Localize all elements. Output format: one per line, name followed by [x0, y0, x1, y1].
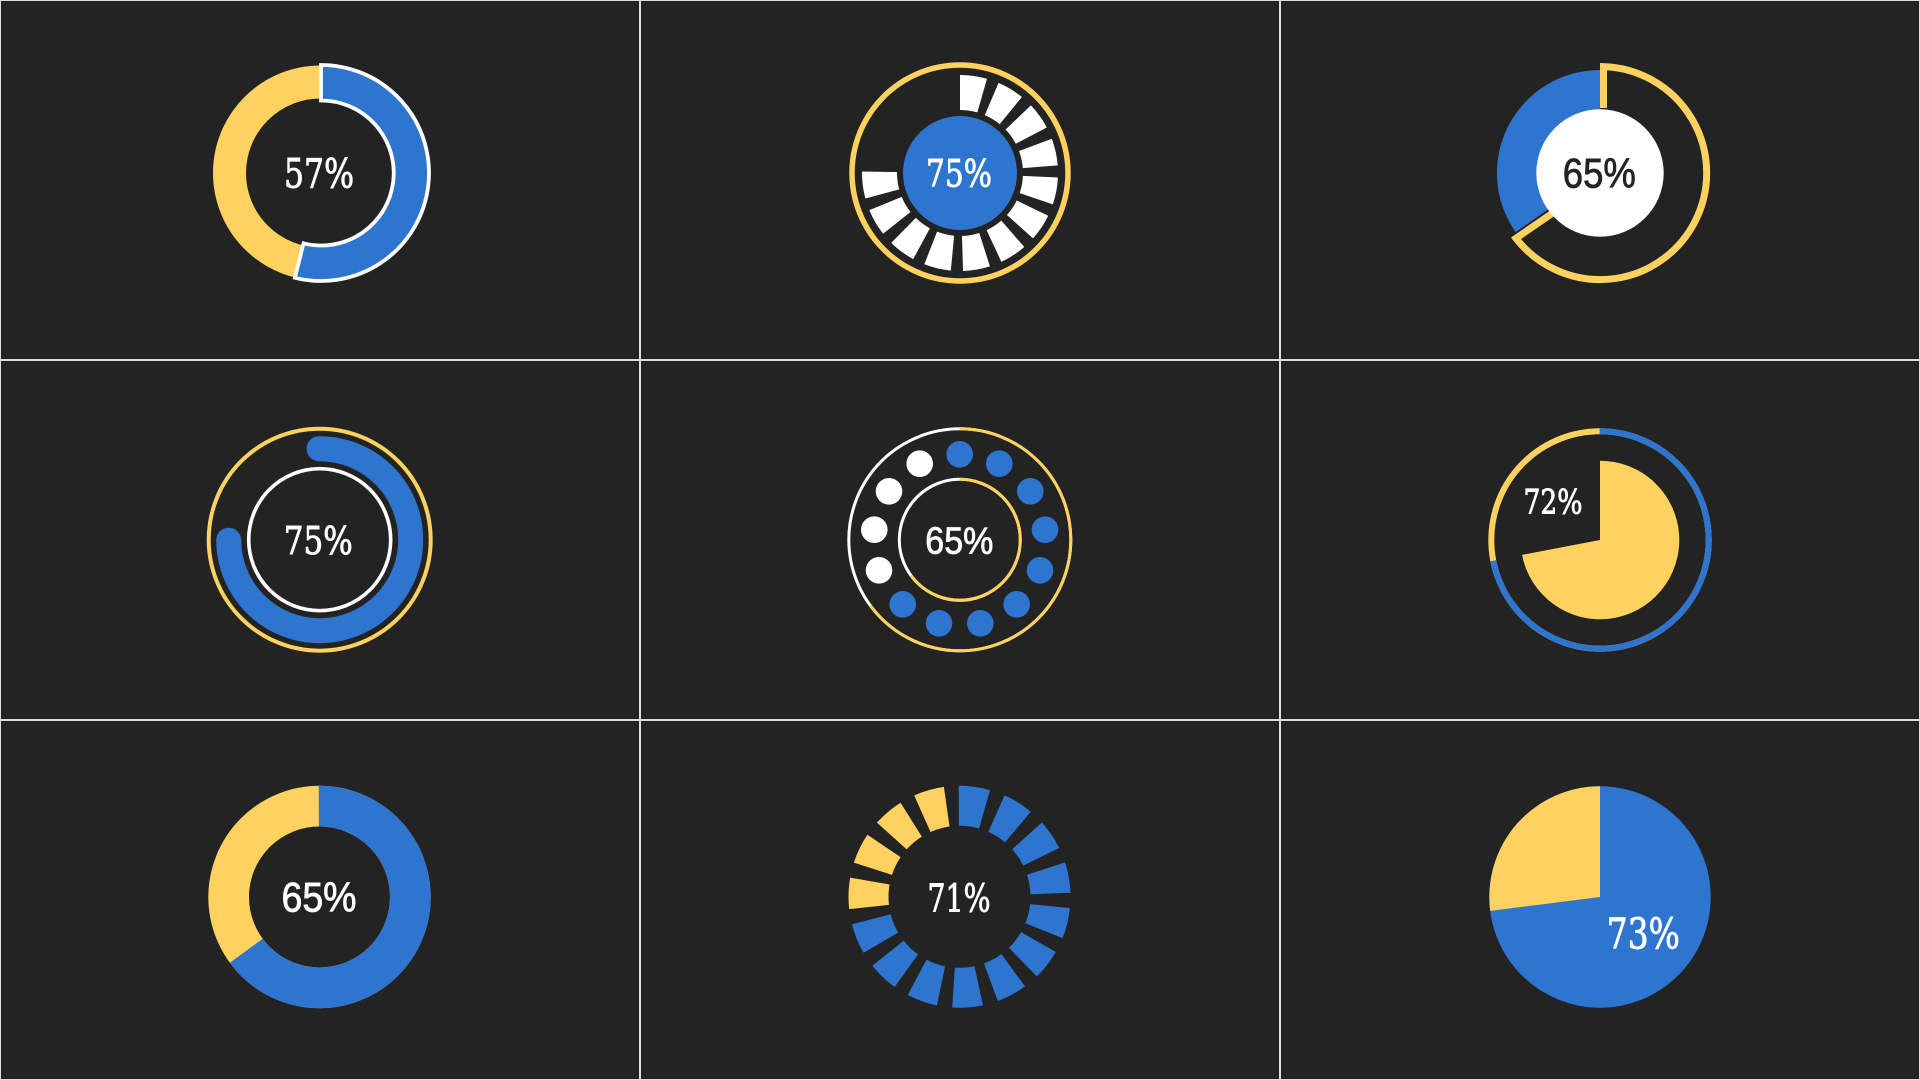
yellow outer ring: [852, 65, 1068, 281]
yellow pie: [1522, 461, 1679, 619]
panel: 65% dot ring: [849, 429, 1071, 651]
outer ring: [849, 429, 1071, 651]
inner ring: [899, 479, 1020, 600]
white inner ring: [249, 469, 391, 611]
panel: 57% outlined donut: [230, 65, 429, 281]
yellow segments: [859, 797, 1060, 997]
yellow outer ring: [209, 429, 431, 651]
value: 65%: 65%: [282, 874, 356, 921]
panel: 75% rounded arc: [209, 429, 431, 651]
blue centre disc: [903, 116, 1017, 230]
value: 75%: 75%: [926, 153, 992, 196]
white segments: [880, 92, 1040, 254]
panel: 75% segmented ring with blue centre: [852, 65, 1068, 281]
panel: 65% plain donut: [229, 806, 410, 988]
blue outlined ring segment: [295, 65, 429, 281]
value: 75%: 75%: [284, 519, 353, 563]
value: 71%: 71%: [928, 877, 990, 921]
white centre disc: [1536, 109, 1664, 237]
yellow sector: [1489, 786, 1600, 911]
white dots: [861, 450, 933, 584]
blue dots: [889, 441, 1058, 637]
value: 65%: 65%: [1563, 149, 1636, 196]
panel: 73% pie: [1489, 786, 1711, 1008]
blue sector: [1497, 70, 1600, 232]
yellow sector outline: [1516, 67, 1707, 280]
yellow ring segment: [230, 82, 412, 264]
panel: 71% segmented donut: [859, 797, 1060, 997]
blue pie: [1489, 786, 1711, 1008]
blue ring part: [229, 806, 410, 988]
blue segments: [868, 806, 1050, 988]
blue ring part: [1491, 431, 1709, 649]
blue rounded arc: [229, 449, 411, 631]
yellow ring part: [229, 806, 410, 988]
value: 73%: 73%: [1607, 909, 1680, 958]
value: 57%: 57%: [284, 151, 354, 197]
yellow ring part: [1491, 431, 1709, 649]
panel: 65% sector with white centre: [1497, 67, 1707, 280]
value: 65%: 65%: [925, 520, 993, 562]
value: 72%: 72%: [1524, 482, 1582, 522]
panel: 72% pie with ring: [1491, 431, 1709, 649]
